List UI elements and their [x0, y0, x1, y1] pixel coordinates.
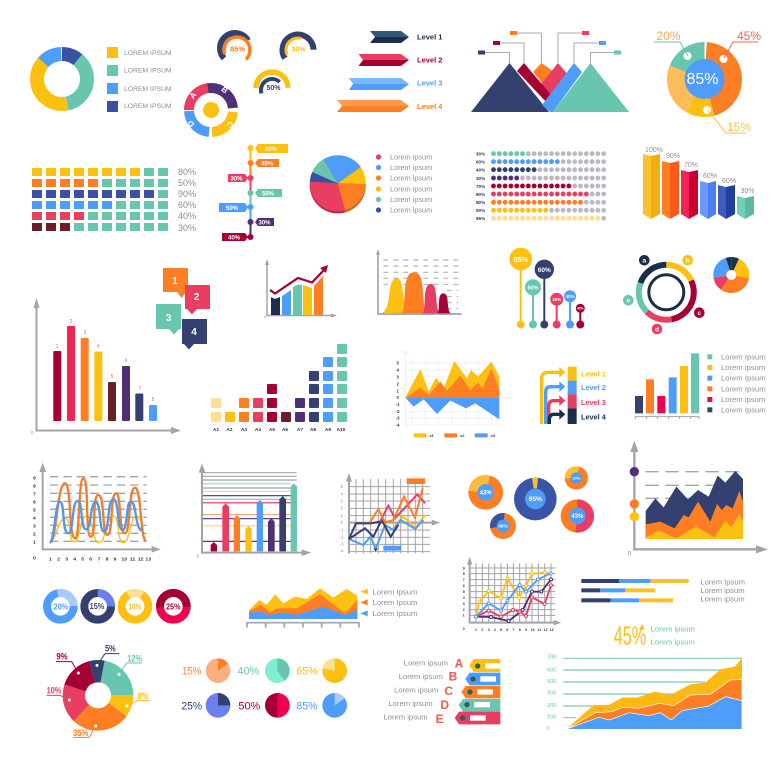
tag A: Lorem ipsum [404, 658, 448, 667]
percentage square grid [32, 167, 196, 233]
pie 50% [238, 693, 290, 718]
axis numbers: 7 [33, 491, 36, 497]
pie legend: Lorem ipsum [390, 206, 432, 214]
level labels: Level 3 [581, 398, 606, 407]
axis values: 1 [396, 388, 399, 393]
tag C [394, 684, 500, 698]
bubble 1: 1 [172, 276, 178, 287]
bar values [645, 147, 755, 195]
bubble 95%: 95% [529, 496, 542, 503]
layered area chart with legend [247, 587, 417, 628]
balloon 50%: 50% [527, 286, 539, 292]
bubble 3: 3 [166, 313, 172, 324]
level labels: Level 1 [581, 369, 606, 378]
callout values: 8% [138, 691, 148, 701]
rounded bars over colored lines chart: 0 [197, 553, 200, 558]
y axis numbers: 5 [340, 484, 343, 489]
45% headline stat [614, 621, 695, 651]
axis values [396, 361, 400, 427]
donut 20% [45, 591, 76, 622]
legend: Lorem Ipsum [373, 598, 417, 607]
y axis numbers: 0 [340, 520, 343, 525]
level labels: Level 2 [581, 383, 606, 392]
axis numbers: 5 [33, 507, 36, 513]
stacked square column chart A1-A10 [211, 344, 347, 433]
bar labels: 1 [56, 344, 59, 350]
row labels: 40% [178, 211, 196, 221]
pie 85% with callouts: 20% [656, 29, 681, 43]
connectors [485, 33, 614, 63]
tag A [404, 657, 500, 672]
axis numbers: 1 [463, 614, 465, 618]
y axis values: 300 [547, 690, 556, 696]
y axis numbers: -1 [340, 527, 344, 532]
y axis numbers: 4 [340, 491, 343, 496]
pie 40% [237, 658, 290, 683]
cycle diagram A B C D: A [188, 90, 199, 100]
chart legend [414, 433, 496, 438]
tag 30%: 30% [230, 176, 243, 182]
column labels [213, 427, 346, 433]
teal background squares [32, 172, 168, 227]
pie 40%: 40% [237, 666, 260, 678]
bar values: 60% [703, 173, 717, 180]
axis numbers: 9 [33, 475, 36, 481]
donut 25% [159, 592, 188, 621]
axis numbers: 10 [531, 628, 535, 632]
axis numbers: 3 [488, 628, 490, 632]
chart legend: x1 [429, 433, 435, 438]
axis numbers: 0 [33, 555, 36, 561]
multi-line marker chart [463, 557, 561, 632]
bar values: 30% [740, 188, 755, 195]
y axis numbers: -4 [340, 549, 344, 554]
crossing line chart on grid [340, 473, 440, 554]
pie 85% [296, 693, 347, 718]
overlapping triangles chart [471, 31, 629, 112]
45% headline stat: 45% [614, 621, 646, 651]
bar labels: 3 [84, 330, 87, 336]
axis numbers: 9 [463, 566, 465, 570]
letter badges: e [626, 298, 630, 304]
level 2: Level 2 [417, 56, 442, 64]
bar labels: Lorem Ipsum [700, 577, 745, 586]
chart legend: x2 [460, 433, 465, 438]
axis numbers: 8 [33, 483, 36, 489]
tag D [388, 698, 500, 712]
bar labels: 8 [152, 397, 155, 403]
row labels: 80% [476, 200, 485, 205]
column labels: A2 [226, 427, 233, 433]
donut 20%: 20% [54, 602, 69, 612]
bar labels: 4 [97, 344, 100, 350]
legend: Lorem Ipsum [721, 405, 766, 414]
labelled tags A-E [383, 657, 500, 726]
letter badges: a [642, 258, 646, 264]
triangles [533, 63, 558, 95]
pie 85% with callouts [654, 29, 761, 134]
tag 40%: 40% [261, 162, 274, 168]
axis numbers: 8 [463, 572, 465, 576]
leader lines [47, 654, 150, 737]
row labels: 90% [178, 189, 196, 199]
vertical timeline with tags [219, 144, 288, 242]
pie 65% [296, 658, 347, 683]
ring chart a-e [623, 255, 705, 334]
gauge 50% [256, 72, 288, 104]
axis numbers [463, 566, 554, 632]
legend: LOREM IPSUM [124, 68, 172, 74]
pie 85% with callouts: 15% [727, 120, 751, 134]
axis numbers: 7 [512, 628, 514, 632]
column labels: A10 [337, 427, 346, 433]
gauge 30% [277, 29, 319, 71]
axis numbers: 11 [537, 628, 541, 632]
row labels: 60% [476, 160, 485, 164]
wave line chart [33, 463, 161, 562]
axis values: 0 [396, 395, 399, 400]
axis numbers: 2 [33, 531, 36, 537]
stacked arrows levels panel [542, 367, 607, 424]
axis numbers: 2 [481, 628, 483, 632]
row labels: 30% [476, 176, 485, 181]
gauge 50%: 50% [266, 85, 281, 92]
donut ring [37, 54, 87, 104]
row labels: 50% [476, 208, 485, 213]
vertical bar chart with axes: 0 [31, 430, 34, 435]
legend: Lorem Ipsum [721, 352, 766, 361]
bar labels [56, 319, 155, 403]
bar labels: 5 [111, 374, 114, 380]
level 4: Level 4 [417, 102, 443, 111]
pie legend: Lorem ipsum [390, 195, 432, 204]
bubble donut cluster [468, 466, 594, 539]
y axis values: 100 [547, 715, 556, 721]
small bar chart with rising arrow: 0 [264, 315, 266, 319]
axis numbers: 13 [146, 556, 151, 562]
row labels: 50% [178, 178, 196, 188]
column labels: A9 [325, 427, 331, 433]
pie 25%: 25% [181, 700, 203, 712]
chart legend: x3 [491, 433, 496, 438]
balloon 85%: 85% [513, 255, 529, 264]
3D bar chart [643, 147, 755, 219]
donut 15%: 15% [90, 601, 105, 611]
row labels: 40% [476, 168, 485, 172]
bubble 2: 2 [194, 292, 200, 303]
tag D: D [440, 698, 449, 712]
axis numbers: 7 [98, 556, 101, 562]
y axis numbers: -3 [340, 542, 344, 547]
cycle diagram A B C D: C [224, 120, 235, 130]
axis numbers: 4 [463, 596, 465, 600]
pie 85%: 85% [296, 700, 318, 712]
pie 15%: 15% [182, 666, 202, 678]
column labels: A1 [213, 427, 219, 433]
legend: Lorem Ipsum [721, 373, 766, 382]
stacked mountain area chart with dots: 0 [627, 551, 631, 558]
grid [405, 358, 502, 427]
row labels [178, 167, 196, 233]
legend: Lorem Ipsum [721, 384, 766, 393]
axis numbers: 6 [33, 499, 36, 505]
row labels: 95% [476, 216, 485, 221]
tag B: B [449, 670, 458, 684]
row labels: 80% [178, 167, 196, 177]
callout values: 12% [127, 653, 142, 663]
positive negative area chart [396, 349, 512, 438]
bubble 30%: 30% [498, 524, 509, 529]
axis numbers: 4 [33, 515, 36, 521]
row labels: 30% [476, 152, 485, 156]
pie legend: Lorem ipsum [390, 163, 432, 172]
lollipop balloon chart [509, 248, 585, 328]
y axis numbers: 2 [340, 506, 343, 511]
vertical bar chart with axes [31, 298, 181, 435]
ribbon arrows levels 1-4 [337, 31, 443, 112]
level labels [581, 369, 607, 421]
letter badges: b [686, 258, 690, 264]
pie legend: Lorem ipsum [390, 174, 432, 182]
percentage donuts row [45, 588, 188, 625]
row labels: 60% [178, 200, 196, 210]
column labels: A5 [269, 427, 275, 433]
tag C: Lorem ipsum [394, 685, 438, 694]
axis numbers: 3 [65, 556, 68, 562]
legend: Lorem Ipsum [373, 587, 417, 596]
column chart with legend [635, 352, 766, 419]
callouts [654, 42, 688, 56]
pie legend [376, 152, 432, 214]
tag 50% teal: 50% [262, 192, 275, 198]
balloon 30%: 30% [552, 297, 561, 302]
axis values: 2 [396, 381, 399, 386]
axis numbers: 4 [73, 556, 76, 562]
speech bubble steps 1-4 [156, 268, 210, 350]
y axis values: 600 [547, 667, 556, 673]
axis numbers: 2 [463, 608, 465, 612]
bubble 18%: 18% [572, 476, 581, 481]
gauge 85% [214, 27, 256, 69]
legend: LOREM IPSUM [124, 50, 172, 57]
y axis values [547, 655, 556, 732]
axis numbers: 1 [49, 556, 52, 562]
column labels: A3 [241, 427, 247, 433]
six small pie charts [181, 658, 347, 718]
legend [707, 352, 766, 414]
axis numbers: 9 [114, 556, 117, 562]
y axis values: 700 [547, 655, 556, 661]
bar values: 70% [684, 162, 698, 169]
axis values: 3 [396, 375, 399, 380]
column labels: A8 [310, 427, 316, 433]
axis numbers: 6 [89, 556, 92, 562]
callout values: 5% [105, 644, 116, 654]
legend [107, 47, 172, 112]
bar labels: 7 [139, 386, 142, 392]
axis numbers: 5 [463, 590, 465, 594]
45% headline stat: Lorem ipsum [651, 625, 695, 634]
axis values: -4 [396, 422, 400, 427]
cycle diagram A B C D [186, 85, 236, 135]
y axis values: 500 [547, 679, 556, 685]
axis numbers: 7 [463, 578, 465, 582]
level labels: Level 4 [581, 412, 607, 421]
column labels: A4 [255, 427, 261, 433]
bar values: 90% [666, 153, 680, 160]
axis numbers: 1 [33, 539, 36, 545]
letter badges: c [697, 310, 701, 317]
bar labels: Lorem ipsum [700, 586, 745, 595]
axis values: -1 [396, 402, 400, 407]
axis values: 4 [396, 368, 399, 373]
balloon 40%: 40% [565, 294, 575, 299]
pie 50%: 50% [238, 700, 261, 712]
gauge 30%: 30% [291, 46, 306, 54]
bar values: 60% [722, 178, 736, 185]
axis numbers: 0 [463, 627, 465, 631]
donut 10%: 10% [129, 601, 142, 611]
rounded bars over colored lines chart [197, 463, 311, 558]
row labels: 70% [476, 184, 485, 189]
y axis numbers [340, 484, 344, 554]
stacked mountain area chart with dots [627, 441, 768, 558]
pie 85% with callouts: 85% [686, 71, 719, 88]
donut 10% [117, 588, 153, 625]
axis numbers: 6 [463, 584, 465, 588]
axis numbers: 9 [525, 628, 527, 632]
bar labels: Lorem ipsum [700, 594, 745, 603]
callout values: 10% [47, 685, 61, 695]
axis numbers: 12 [138, 556, 144, 562]
balloon 60%: 60% [538, 267, 551, 274]
axis numbers [33, 475, 151, 562]
gauge 85%: 85% [230, 44, 245, 54]
tag B [399, 670, 500, 685]
axis numbers: 6 [506, 628, 508, 632]
small bar chart with rising arrow [264, 259, 337, 319]
axis numbers: 12 [544, 628, 548, 632]
tag A: A [455, 657, 464, 671]
y axis numbers: -2 [340, 535, 344, 540]
pie legend: Lorem ipsum [390, 184, 432, 194]
cycle diagram A B C D: B [220, 85, 230, 96]
donut 25%: 25% [166, 601, 181, 611]
bar values: 100% [645, 147, 663, 154]
y axis values: 200 [547, 703, 556, 709]
45% headline stat: Lorem ipsum [651, 637, 695, 646]
axis values: -2 [396, 409, 400, 414]
callout values: 35% [73, 728, 88, 738]
tag C: C [444, 684, 453, 698]
letter badges [623, 255, 705, 334]
legend: LOREM IPSUM [124, 103, 172, 110]
cycle diagram A B C D: D [186, 118, 196, 129]
axis numbers: 3 [463, 602, 465, 606]
tag B: Lorem ipsum [399, 672, 443, 681]
bar labels [700, 577, 745, 603]
bell curve area chart [376, 249, 462, 314]
axis numbers: 8 [106, 556, 109, 562]
dot matrix percentage chart [476, 152, 608, 221]
tag 30% purple: 30% [258, 220, 271, 226]
pie legend: Lorem ipsum [390, 152, 432, 162]
axis numbers: 11 [130, 556, 136, 562]
letter badges: d [655, 326, 659, 334]
tag E: Lorem ipsum [383, 712, 428, 721]
column labels: A6 [282, 427, 288, 433]
big donut with callouts [47, 644, 150, 738]
pie 15% [182, 658, 230, 683]
bubble 43% pink: 43% [571, 514, 584, 520]
legend: LOREM IPSUM [124, 86, 172, 93]
column labels: A7 [297, 427, 303, 433]
axis numbers: 5 [81, 556, 84, 562]
axis numbers: 3 [33, 523, 36, 529]
axis numbers: 1 [475, 628, 477, 632]
3D pie chart with legend [310, 152, 432, 214]
tag E [383, 712, 500, 726]
pie 25% [181, 693, 230, 718]
callout values [47, 644, 148, 738]
axis numbers: 8 [519, 628, 521, 632]
legend: Lorem Ipsum [373, 609, 417, 618]
balloon small: 40% [577, 306, 584, 310]
large stacked area chart [547, 655, 742, 732]
axis numbers: 13 [550, 628, 554, 632]
legend [360, 587, 417, 618]
level 3: Level 3 [417, 78, 442, 88]
small donut pie [720, 264, 743, 286]
axis numbers: 2 [57, 556, 60, 562]
axis numbers: 5 [500, 628, 502, 632]
tag 80%: 80% [265, 147, 278, 153]
axis numbers: 4 [494, 628, 496, 632]
donut 15% [84, 593, 111, 620]
row labels: 30% [178, 223, 196, 233]
donut chart with legend [37, 47, 172, 112]
pie 85% with callouts: 45% [737, 29, 761, 43]
axis numbers: 10 [122, 556, 127, 562]
tag 40% crimson: 40% [228, 236, 241, 242]
row labels [476, 152, 485, 221]
bubble 43%: 43% [480, 490, 492, 496]
trend arrow [270, 270, 324, 294]
y axis values: 0 [547, 726, 550, 732]
bars [53, 351, 61, 421]
axis values: 5 [396, 361, 399, 366]
bar labels: 2 [70, 319, 73, 325]
bar labels: 6 [125, 358, 128, 364]
y axis numbers: 1 [340, 513, 343, 518]
stacked horizontal bars [581, 577, 745, 603]
rounded bars [211, 542, 217, 551]
tag D: Lorem ipsum [388, 699, 433, 708]
tag 50% blue: 50% [226, 206, 239, 212]
callout values: 9% [56, 652, 68, 662]
legend: Lorem ipsum [721, 363, 765, 372]
level 1: Level 1 [417, 32, 442, 42]
bubble 4: 4 [191, 327, 197, 338]
axis values: -3 [396, 416, 400, 421]
row labels: 90% [476, 192, 485, 197]
pie 65%: 65% [296, 666, 318, 678]
legend: Lorem ipsum [721, 395, 765, 404]
tag E: E [436, 712, 444, 726]
y axis numbers: 3 [340, 499, 343, 504]
